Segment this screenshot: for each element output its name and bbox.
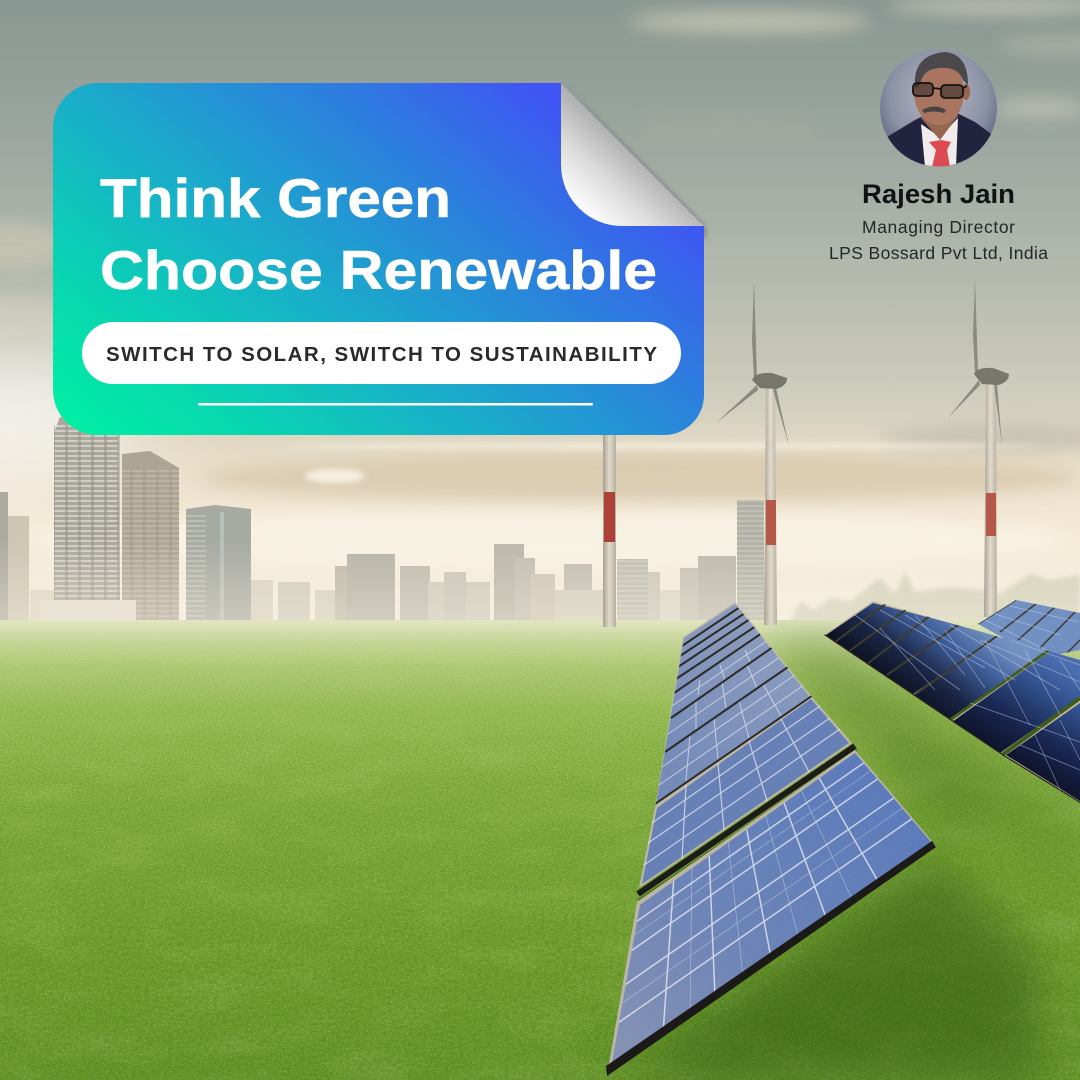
name and role: Rajesh Jain — [862, 179, 1015, 209]
rear row panels — [978, 600, 1080, 654]
icon: page curl — [561, 83, 704, 226]
far panels — [650, 600, 820, 810]
portrait — [880, 49, 997, 170]
title: Choose Renewable — [100, 239, 657, 301]
middle row panels — [820, 598, 1080, 808]
solar array: right rear rows — [820, 595, 1080, 808]
background: clouds — [0, 0, 1080, 568]
panel 1, nearest — [600, 745, 940, 1076]
distant trees — [790, 572, 1080, 622]
name and role: LPS Bossard Pvt Ltd, India — [829, 243, 1048, 263]
background: sky — [0, 0, 1080, 625]
horizon fog — [0, 540, 1080, 622]
name and role — [829, 179, 1048, 263]
banner card — [53, 83, 704, 435]
grass field — [0, 620, 1080, 1080]
wind turbine 2 — [716, 281, 789, 625]
title: Think Green — [100, 167, 451, 229]
underline rule — [198, 403, 593, 406]
city skyline — [0, 417, 764, 620]
tagline pill: SWITCH TO SOLAR, SWITCH TO SUSTAINABILITY — [106, 343, 657, 366]
wind turbine 1 (behind card) — [603, 430, 616, 627]
panel 2 — [638, 697, 857, 900]
solar array: front row — [600, 600, 940, 1076]
fold shadow on background — [561, 83, 706, 240]
name and role: Managing Director — [862, 217, 1015, 237]
wind turbine 3 — [948, 279, 1009, 617]
tagline pill — [82, 322, 681, 384]
title — [100, 167, 657, 301]
